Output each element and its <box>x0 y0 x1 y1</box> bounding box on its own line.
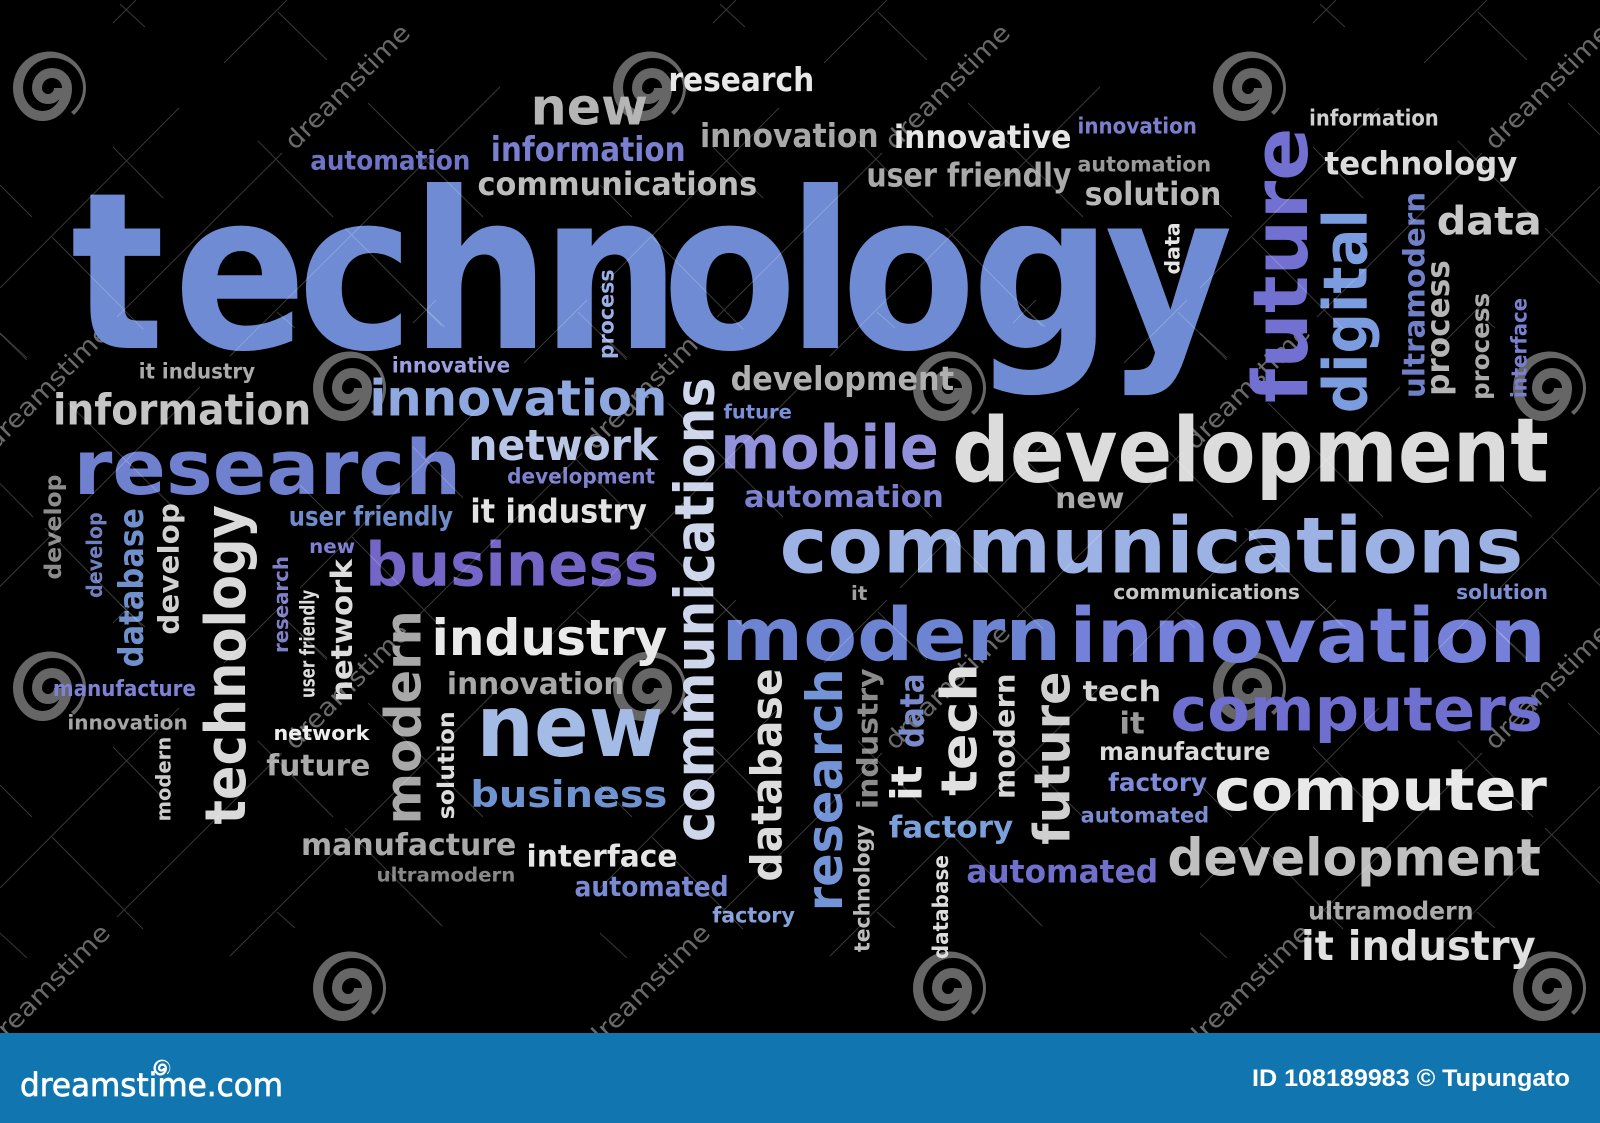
vertical words: network <box>325 558 359 702</box>
horizontal words: new <box>309 535 355 558</box>
horizontal words: future <box>266 749 370 783</box>
vertical words: data <box>1161 222 1185 274</box>
horizontal words: ultramodern <box>377 864 515 887</box>
horizontal words: interface <box>527 839 678 874</box>
horizontal words: development <box>731 360 954 398</box>
horizontal words: information <box>53 385 311 435</box>
horizontal words: automated <box>1081 803 1209 828</box>
vertical words: data <box>893 673 931 748</box>
horizontal words: communications <box>478 167 757 203</box>
vertical words: develop <box>152 503 186 635</box>
footer image ID and credit: ID 108189983 © Tupungato <box>1252 1065 1570 1092</box>
horizontal words: network <box>468 421 660 471</box>
vertical words: industry <box>851 668 885 809</box>
watermark spirals and text: dreamstime <box>579 918 716 1055</box>
watermark spirals and text: dreamstime <box>1179 318 1316 455</box>
horizontal words: it industry <box>1301 922 1536 970</box>
horizontal words: future <box>723 400 792 423</box>
vertical words: develop <box>39 474 67 580</box>
horizontal words: solution <box>1085 177 1221 213</box>
vertical words: database <box>743 668 793 882</box>
vertical words: tech <box>931 663 989 796</box>
horizontal words: development <box>507 465 655 490</box>
horizontal words: technology <box>71 145 1233 399</box>
horizontal words: development <box>952 400 1549 503</box>
vertical words: process <box>1421 260 1457 396</box>
horizontal words: data <box>1437 200 1542 245</box>
watermark spirals and text: dreamstime <box>579 318 716 455</box>
horizontal words: it industry <box>470 492 647 530</box>
horizontal words: solution <box>1456 580 1548 604</box>
horizontal words: computers <box>1170 676 1543 746</box>
horizontal words: manufacture <box>1099 737 1270 766</box>
vertical words: research <box>796 668 854 911</box>
vertical words: research <box>269 556 293 653</box>
vertical words: modern <box>987 673 1021 799</box>
horizontal words: modern <box>721 593 1061 678</box>
horizontal words: innovation <box>1069 592 1546 680</box>
horizontal words: automation <box>310 145 470 176</box>
horizontal words: user friendly <box>866 157 1071 195</box>
vertical words: develop <box>83 512 108 598</box>
watermark spirals and text: dreamstime <box>879 18 1016 155</box>
horizontal words: it <box>1119 707 1145 742</box>
horizontal words: information <box>491 130 686 169</box>
vertical words: technology <box>194 505 259 824</box>
horizontal words: business <box>470 773 667 816</box>
horizontal words: communications <box>780 501 1523 591</box>
vertical words: future <box>1023 671 1081 845</box>
horizontal words: automation <box>744 480 944 515</box>
horizontal words: innovation <box>369 369 667 427</box>
horizontal words: research <box>668 61 814 99</box>
horizontal words: factory <box>889 811 1013 846</box>
horizontal words: factory <box>1108 768 1207 797</box>
vertical words: modern <box>374 610 432 824</box>
watermark spirals and text: dreamstime <box>879 618 1016 755</box>
horizontal words: new <box>477 677 663 777</box>
horizontal words: research <box>73 424 461 512</box>
watermark spirals and text: dreamstime <box>279 618 416 755</box>
horizontal words: it <box>851 582 867 605</box>
horizontal words: automated <box>574 871 729 903</box>
vertical words: digital <box>1311 209 1381 413</box>
horizontal words: industry <box>432 609 667 667</box>
vertical words: it <box>882 765 932 801</box>
horizontal words <box>53 61 1549 970</box>
horizontal words: manufacture <box>301 828 516 863</box>
vertical words: modern <box>151 737 175 821</box>
footer bar <box>0 1033 1600 1123</box>
horizontal words: new <box>1055 481 1124 515</box>
vertical words <box>39 128 1533 959</box>
vertical words: communications <box>663 378 726 842</box>
vertical words: process <box>594 269 619 359</box>
horizontal words: information <box>1309 106 1439 132</box>
horizontal words: it industry <box>139 360 255 385</box>
vertical words: future <box>1237 128 1325 403</box>
horizontal words: user friendly <box>289 502 453 533</box>
vertical words: database <box>112 508 151 667</box>
vertical words: solution <box>432 711 460 819</box>
horizontal words: innovation <box>700 117 879 155</box>
horizontal words: innovation <box>1078 114 1197 140</box>
horizontal words: automation <box>1078 152 1211 177</box>
watermark spirals and text: dreamstime <box>1179 918 1316 1055</box>
horizontal words: innovation <box>447 667 624 702</box>
vertical words: database <box>929 855 954 959</box>
horizontal words: business <box>365 531 659 601</box>
horizontal words: network <box>273 721 370 745</box>
vertical words: user friendly <box>295 590 319 698</box>
horizontal words: technology <box>1324 146 1518 182</box>
horizontal words: factory <box>712 903 795 928</box>
footer logo: dreamstime.com: dreamstime.com <box>20 1066 283 1104</box>
horizontal words: innovation <box>67 711 188 735</box>
horizontal words: new <box>531 78 648 137</box>
horizontal words: tech <box>1083 674 1161 708</box>
horizontal words: manufacture <box>53 676 196 702</box>
horizontal words: ultramodern <box>1308 896 1473 925</box>
horizontal words: innovative <box>894 120 1071 156</box>
vertical words: ultramodern <box>1397 192 1431 398</box>
watermark spirals and text: dreamstime <box>279 18 416 155</box>
vertical words: technology <box>850 824 875 952</box>
horizontal words: development <box>1167 829 1541 889</box>
horizontal words: communications <box>1113 580 1300 604</box>
horizontal words: mobile <box>720 413 939 483</box>
horizontal words: computer <box>1214 756 1547 824</box>
vertical words: interface <box>1508 298 1533 398</box>
horizontal words: innovative <box>392 353 510 378</box>
horizontal words: automated <box>966 855 1158 891</box>
vertical words: process <box>1466 293 1495 400</box>
